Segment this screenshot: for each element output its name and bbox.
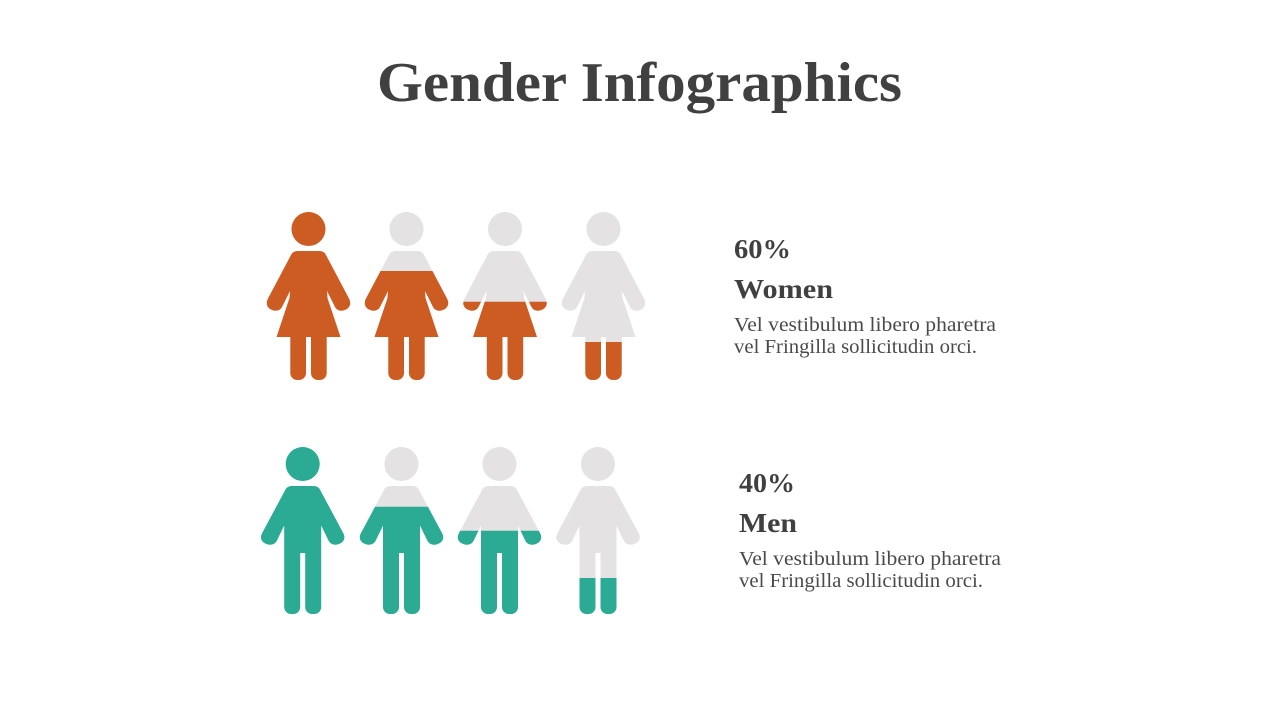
text block: women — [734, 234, 996, 358]
icon: man filled to shins — [556, 447, 640, 614]
icon: man filled to chest — [360, 447, 443, 614]
icon: woman filled to chest — [365, 212, 448, 380]
men description: Vel vestibulum libero pharetra — [739, 548, 1001, 570]
icon: woman filled to shins — [562, 212, 645, 380]
men percentage: 40% — [739, 468, 795, 498]
text block: men — [739, 468, 1001, 592]
icon: woman filled to waist — [463, 212, 547, 380]
icon: man fully filled — [261, 447, 344, 614]
women percentage: 60% — [734, 234, 791, 264]
women heading: Women — [734, 274, 833, 304]
icon: man filled to waist — [458, 447, 541, 614]
women description: Vel vestibulum libero pharetra — [734, 314, 996, 336]
women description: vel Fringilla sollicitudin orci. — [734, 336, 977, 358]
panel: women — [267, 212, 996, 380]
title: Gender Infographics — [377, 52, 902, 114]
panel: men — [261, 447, 1001, 614]
icon: woman fully filled — [267, 212, 350, 380]
men description: vel Fringilla sollicitudin orci. — [739, 570, 983, 592]
men heading: Men — [739, 508, 797, 538]
